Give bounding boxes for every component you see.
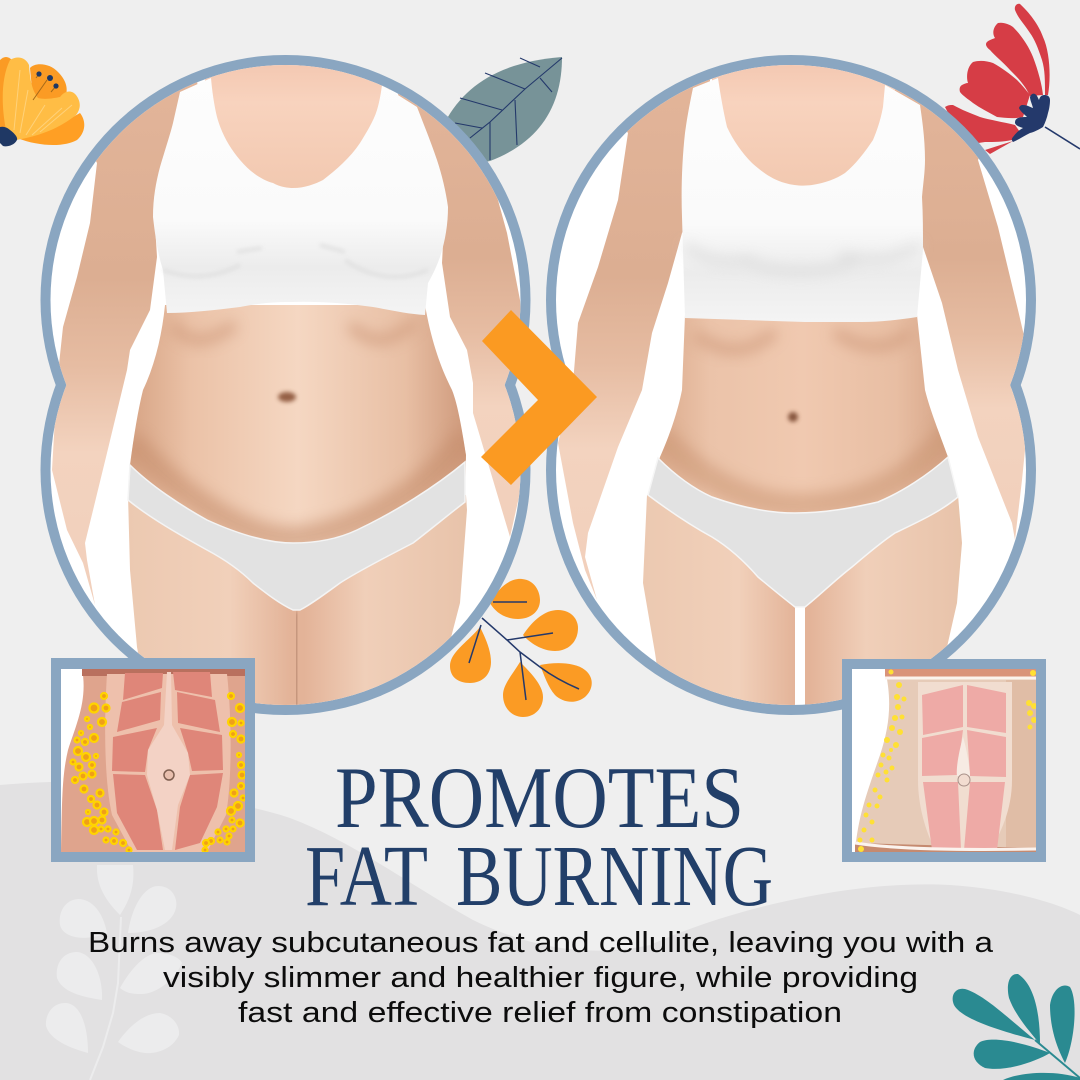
figure after — [558, 50, 1030, 720]
inset illustration — [61, 669, 246, 852]
left arm — [558, 60, 710, 600]
background wave — [0, 781, 1080, 1080]
description line 1: Burns away subcutaneous fat and cellulite, leaving you with a — [88, 927, 994, 959]
icon: grey-teal leaf — [445, 57, 562, 165]
right arm — [398, 94, 520, 537]
photo background — [50, 65, 520, 705]
arrow: orange chevron — [481, 310, 597, 485]
description text — [88, 927, 994, 1029]
inset: abdomen after — [842, 659, 1046, 862]
inset illustration — [855, 669, 1037, 852]
faint branch decoration — [46, 865, 182, 1080]
navel — [278, 392, 296, 402]
chest skin — [712, 65, 895, 186]
inset background — [852, 669, 1036, 852]
chest skin — [205, 65, 390, 188]
icon: teal leaves bottom right — [953, 974, 1080, 1080]
panel: before photo — [40, 50, 530, 720]
inset background — [61, 669, 245, 852]
heading line 2 word 2: BURNING — [456, 827, 773, 924]
panel: after photo — [546, 50, 1036, 720]
belly shading — [130, 322, 466, 538]
bra — [682, 78, 925, 322]
description line 3: fast and effective relief from constipation — [238, 997, 842, 1029]
underwear — [648, 457, 958, 607]
thighs — [643, 495, 962, 720]
heading — [305, 750, 773, 924]
torso — [130, 305, 466, 542]
icon: orange branch — [450, 579, 592, 717]
inset: abdomen before — [51, 658, 255, 862]
photo background — [556, 65, 1026, 705]
left arm — [52, 60, 200, 605]
heading line 2 word 1: FAT — [305, 827, 428, 924]
photo frame — [546, 55, 1036, 715]
underwear — [128, 462, 465, 610]
thighs — [128, 495, 467, 720]
bra shading — [163, 245, 428, 277]
heading line 1: PROMOTES — [335, 750, 744, 847]
belly shading — [660, 332, 950, 505]
inset frame — [842, 659, 1046, 862]
figure before — [52, 50, 525, 720]
description line 2: visibly slimmer and healthier figure, while providing — [163, 962, 918, 994]
icon: red flower top right — [945, 4, 1080, 154]
photo frame — [40, 55, 530, 715]
navel — [788, 412, 798, 422]
crotch line — [296, 611, 298, 705]
right arm — [895, 70, 1030, 540]
torso — [660, 316, 948, 512]
bra — [153, 78, 448, 315]
icon: orange flower top left — [0, 57, 84, 146]
bra shading — [691, 246, 914, 268]
inset frame — [51, 658, 255, 862]
